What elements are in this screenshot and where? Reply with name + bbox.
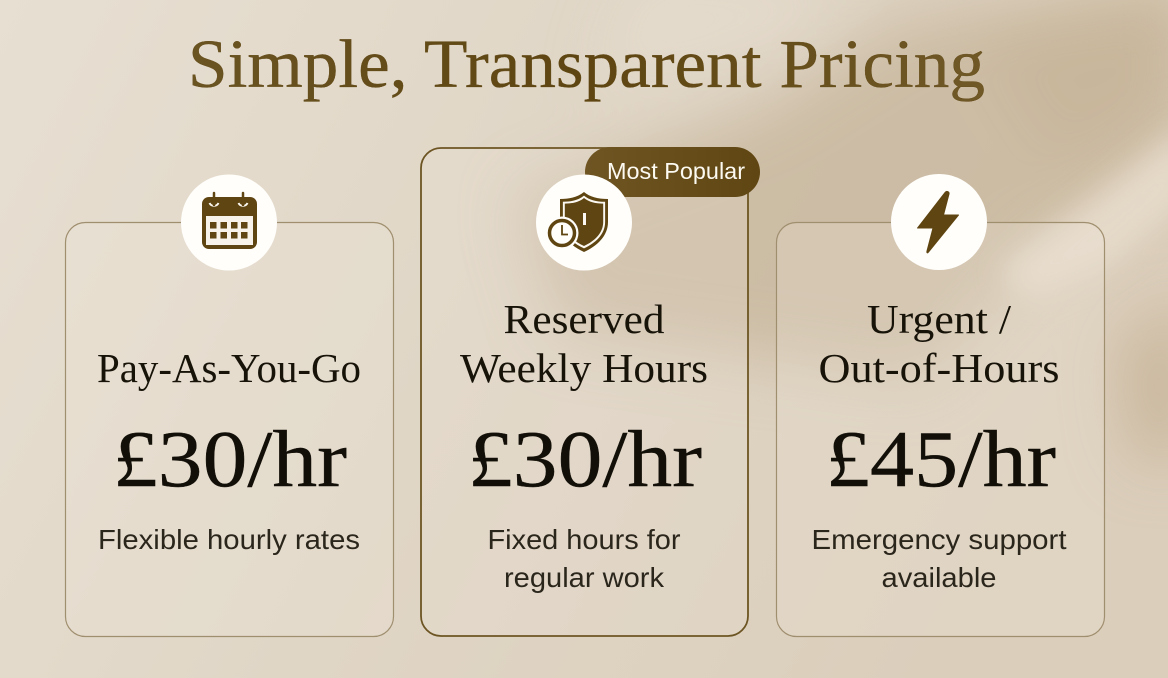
panel: urgent / out-of-hours xyxy=(776,174,1104,636)
icon: lightning bolt xyxy=(891,174,987,270)
price: £30/hr xyxy=(113,416,347,504)
panel: reserved weekly hours xyxy=(421,147,760,636)
title: Simple, Transparent Pricing xyxy=(188,26,985,102)
panel: reserved weekly hours: regular work xyxy=(504,562,665,593)
panel: pay-as-you-go xyxy=(66,174,394,636)
badge: most popular: Most Popular xyxy=(607,158,745,184)
plan name: Reserved xyxy=(504,296,664,342)
panel: reserved weekly hours: Weekly Hours xyxy=(460,345,708,391)
plan name: Urgent / xyxy=(867,296,1012,342)
description: Flexible hourly rates xyxy=(98,524,360,555)
plan name: Pay-As-You-Go xyxy=(97,345,361,391)
description: Fixed hours for xyxy=(488,524,680,555)
price: £30/hr xyxy=(468,416,702,504)
panel: urgent / out-of-hours: available xyxy=(882,562,996,593)
icon: calendar xyxy=(181,174,277,270)
badge: most popular xyxy=(585,147,760,197)
icon: shield and clock xyxy=(536,174,632,270)
description: Emergency support xyxy=(812,524,1067,555)
panel: urgent / out-of-hours: Out-of-Hours xyxy=(818,345,1060,391)
price: £45/hr xyxy=(826,416,1056,504)
